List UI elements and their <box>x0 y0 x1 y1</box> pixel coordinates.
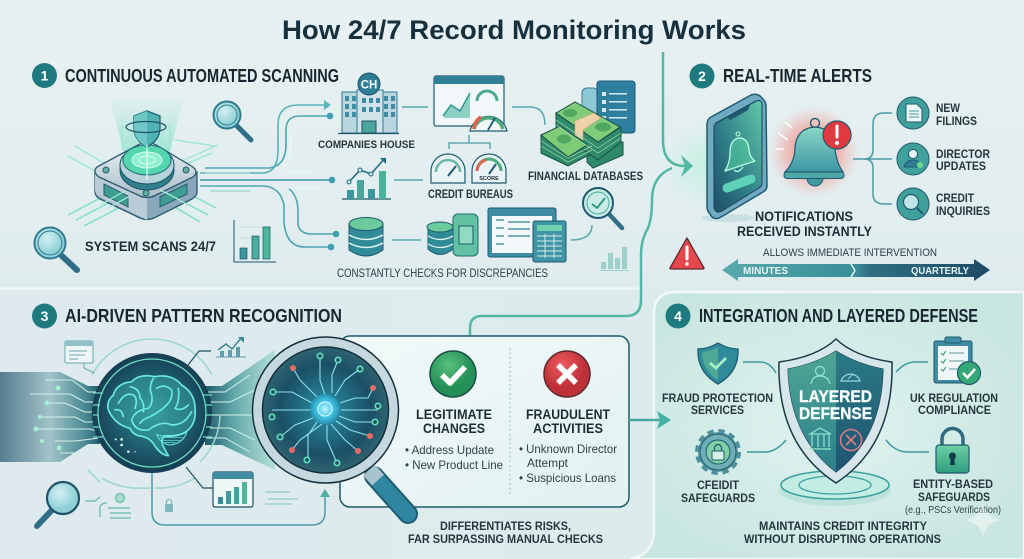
section 1: continuous automated scanning <box>32 63 643 280</box>
heading 3: AI-DRIVEN PATTERN RECOGNITION <box>65 306 342 326</box>
label: legitimate changes: LEGITIMATE <box>416 407 492 422</box>
icon: padlock <box>936 428 969 473</box>
label: notifications: NOTIFICATIONS <box>755 209 853 224</box>
icon: trend chart <box>188 337 246 365</box>
glow behind phone <box>663 123 747 207</box>
badge 2 <box>690 64 714 88</box>
icon: person node <box>85 494 131 518</box>
label: uk regulation <box>910 391 998 417</box>
label: new filings: FILINGS <box>936 114 977 128</box>
label: entity-based safeguards <box>905 477 1001 516</box>
data band to magnifier <box>205 350 275 470</box>
badge 3: 3 <box>41 308 49 324</box>
label: maintains credit integrity: WITHOUT DISRUPTING OPERATIONS <box>744 532 941 546</box>
label: legitimate changes <box>416 407 492 436</box>
icon: companies house building <box>338 73 399 134</box>
panel: top area wash <box>0 0 1024 288</box>
icon: small lock <box>165 500 173 512</box>
heading 1: CONTINUOUS AUTOMATED SCANNING <box>65 66 339 86</box>
label: notifications: RECEIVED INSTANTLY <box>737 224 872 239</box>
label: credit inquiries: INQUIRIES <box>936 204 990 218</box>
connector: green flow line <box>470 52 693 336</box>
timeline arrow <box>722 259 990 281</box>
connectors <box>743 362 929 452</box>
icon: document note <box>65 341 94 373</box>
icon: fraud shield <box>698 343 738 384</box>
label: entity-based safeguards: ENTITY-BASED <box>913 477 993 491</box>
icon: sparkle <box>965 503 1001 537</box>
icon: data documents <box>392 214 478 256</box>
icon: credit gauges <box>394 154 506 183</box>
icon: large magnifier <box>252 337 408 514</box>
label: maintains credit integrity: MAINTAINS CREDIT INTEGRITY <box>759 519 927 533</box>
label: constantly checks: CONSTANTLY CHECKS FOR DISCREPANCIES <box>337 266 548 280</box>
icon: bar chart <box>234 220 276 262</box>
label: fraud protection: SERVICES <box>691 403 744 417</box>
list: legitimate: • Address Update <box>405 443 494 457</box>
heading 2: REAL-TIME ALERTS <box>723 66 872 86</box>
icon: credit gear <box>698 432 738 472</box>
arrow: to section 4 <box>629 411 671 429</box>
label: companies house: COMPANIES HOUSE <box>318 139 415 151</box>
icon: chart window <box>186 467 253 507</box>
flow lines <box>200 100 339 250</box>
list: legitimate <box>405 443 503 472</box>
icon: clipboard compliance <box>934 337 980 384</box>
label: legitimate changes: CHANGES <box>423 421 485 436</box>
icon: platform <box>779 471 891 506</box>
label: fraudulent activities: ACTIVITIES <box>533 421 603 436</box>
icon: dashboard with gauges <box>402 76 545 149</box>
label: new filings <box>936 101 977 128</box>
icon: bell with alert <box>768 106 860 198</box>
list: legitimate: • New Product Line <box>405 458 503 472</box>
icon: growth chart <box>342 158 391 199</box>
icon: new filings <box>897 97 929 129</box>
icon: browser window and calculator <box>488 208 566 262</box>
label: credit bureaus: CREDIT BUREAUS <box>428 187 513 201</box>
label: differentiates risks: DIFFERENTIATES RISKS, <box>440 519 571 533</box>
badge 2: 2 <box>698 68 706 84</box>
icon: verified magnifier <box>571 188 622 240</box>
label: fraud protection: FRAUD PROTECTION <box>662 391 773 405</box>
data band input <box>0 372 100 462</box>
icon: director updates <box>897 143 929 175</box>
icon: scanner device <box>68 100 218 226</box>
label: director updates <box>936 147 990 173</box>
section 4: integration and layered defense <box>662 304 1001 546</box>
icon: database stack <box>349 218 383 256</box>
label: fraudulent activities <box>526 407 611 436</box>
icon: layered defense shield <box>779 339 892 483</box>
label: uk regulation: UK REGULATION <box>910 391 998 405</box>
timeline arrow: QUARTERLY <box>911 265 969 277</box>
label: fraud protection <box>662 391 773 417</box>
circuit lines <box>272 356 378 463</box>
label: entity-based safeguards: SAFEGUARDS <box>918 490 990 504</box>
panel: classification <box>340 336 629 507</box>
arcs around brain <box>88 339 220 488</box>
icon: money and database <box>541 81 635 168</box>
icon: companies house building: CH <box>361 80 377 92</box>
label: system scans: SYSTEM SCANS 24/7 <box>85 239 216 254</box>
label: uk regulation: COMPLIANCE <box>918 403 991 417</box>
label: credit safeguards: SAFEGUARDS <box>681 491 755 505</box>
label: entity-based safeguards: (e.g., PSCs Verification) <box>905 505 1001 516</box>
label: differentiates risks: FAR SURPASSING MANUAL CHECKS <box>408 532 603 546</box>
title: How 24/7 Record Monitoring Works <box>282 15 746 45</box>
label: credit safeguards: CFEIDIT <box>697 478 740 492</box>
icon: credit gauges: SCORE <box>479 176 499 182</box>
icon: layered defense shield: DEFENSE <box>799 404 872 423</box>
label: differentiates risks <box>408 519 603 546</box>
label: maintains credit integrity <box>744 519 941 546</box>
label: fraudulent activities: FRAUDULENT <box>526 407 611 422</box>
label: credit safeguards <box>681 478 755 505</box>
badge 4 <box>666 304 690 328</box>
label: financial databases: FINANCIAL DATABASES <box>528 169 643 183</box>
timeline arrow: MINUTES <box>743 265 788 277</box>
icon: magnifier top <box>214 102 251 140</box>
label: credit inquiries: CREDIT <box>936 191 975 205</box>
divider: top and bottom rows <box>0 288 640 290</box>
badge 1 <box>32 63 57 88</box>
label: director updates: UPDATES <box>936 159 986 173</box>
icon: magnifier bottom <box>34 228 77 270</box>
badge 1: 1 <box>41 68 49 84</box>
label: new filings: NEW <box>936 101 961 115</box>
badge 3 <box>32 304 57 328</box>
section 3: AI-driven pattern recognition <box>0 304 671 546</box>
connector: branch lines <box>853 113 892 204</box>
panel: integration background <box>630 292 1024 559</box>
label: director updates: DIRECTOR <box>936 147 990 161</box>
label: credit inquiries <box>936 191 990 218</box>
icon: check <box>430 351 476 397</box>
icon: brain circle <box>93 354 212 472</box>
label: notifications <box>737 209 872 239</box>
list: fraudulent: • Suspicious Loans <box>519 471 616 485</box>
icon: warning triangle <box>670 238 704 269</box>
list: fraudulent: • Unknown Director <box>519 442 617 456</box>
list: fraudulent <box>519 442 617 485</box>
badge 4: 4 <box>674 308 682 324</box>
icon: cross <box>544 351 590 397</box>
list: fraudulent: Attempt <box>527 456 569 470</box>
section 2: real-time alerts <box>670 64 990 281</box>
label: allows immediate intervention: ALLOWS IMMEDIATE INTERVENTION <box>763 247 937 259</box>
icon: faint bars <box>600 247 629 271</box>
decorative lines <box>265 492 298 504</box>
icon: small magnifier <box>37 482 79 526</box>
icon: credit inquiries <box>897 188 929 220</box>
icon: layered defense shield: LAYERED <box>799 387 872 406</box>
icon: phone <box>702 94 767 222</box>
connector: feedback loop <box>152 473 330 525</box>
